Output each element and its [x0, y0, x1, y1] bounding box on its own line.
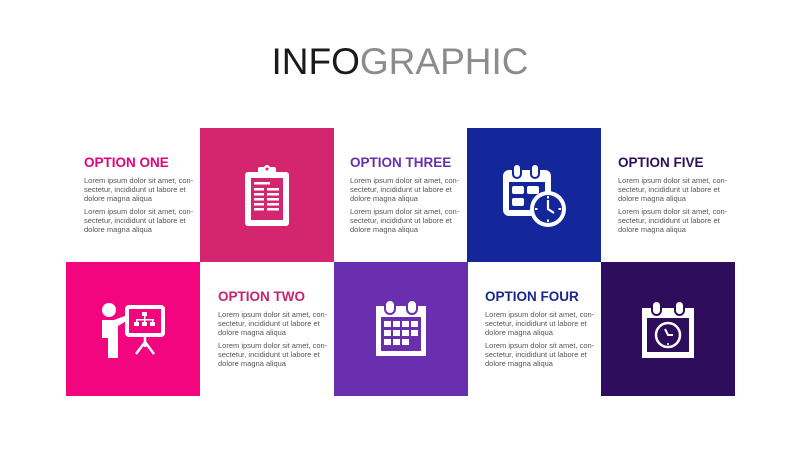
icon: clipboard — [245, 165, 289, 226]
panel: option five text: OPTION FIVE — [618, 155, 704, 170]
panel: calendar square — [334, 262, 468, 396]
panel: option five text — [618, 155, 727, 234]
panel: option four text: Lorem ipsum dolor sit amet, con-sectetur, incididunt ut labore et dolore magna aliqua — [485, 341, 594, 368]
icon: calendar — [376, 301, 426, 356]
panel: option one text: Lorem ipsum dolor sit amet, con-sectetur, incididunt ut labore et dolore magna aliqua — [84, 207, 193, 234]
title: INFOGRAPHIC — [272, 41, 528, 82]
panel: option three text: Lorem ipsum dolor sit amet, con-sectetur, incididunt ut labore et dolore magna aliqua — [350, 207, 459, 234]
panel: calendar clock dark square — [601, 262, 735, 396]
panel: option two text: Lorem ipsum dolor sit amet, con-sectetur, incididunt ut labore et dolore magna aliqua — [218, 341, 327, 368]
panel: option three text: OPTION THREE — [350, 155, 451, 170]
panel: clipboard square — [200, 128, 334, 262]
panel: option one text: Lorem ipsum dolor sit amet, con-sectetur, incididunt ut labore et dolore magna aliqua — [84, 176, 193, 203]
panel: option two text — [218, 289, 327, 368]
panel: option one text — [84, 155, 193, 234]
icon: calendar with clock face — [642, 302, 694, 358]
icon: calendar with clock — [503, 165, 566, 227]
panel: presenter square — [66, 262, 200, 396]
panel: option three text — [350, 155, 459, 234]
panel: option four text: OPTION FOUR — [485, 289, 579, 304]
icon: presenter — [102, 303, 165, 358]
panel: option three text: Lorem ipsum dolor sit amet, con-sectetur, incididunt ut labore et dolore magna aliqua — [350, 176, 459, 203]
panel: option one text: OPTION ONE — [84, 155, 169, 170]
panel: calendar clock square — [467, 128, 601, 262]
panel: option two text: OPTION TWO — [218, 289, 305, 304]
panel: option two text: Lorem ipsum dolor sit amet, con-sectetur, incididunt ut labore et dolore magna aliqua — [218, 310, 327, 337]
panel: option four text — [485, 289, 594, 368]
panel: option five text: Lorem ipsum dolor sit amet, con-sectetur, incididunt ut labore et dolore magna aliqua — [618, 176, 727, 203]
panel: option five text: Lorem ipsum dolor sit amet, con-sectetur, incididunt ut labore et dolore magna aliqua — [618, 207, 727, 234]
panel: option four text: Lorem ipsum dolor sit amet, con-sectetur, incididunt ut labore et dolore magna aliqua — [485, 310, 594, 337]
